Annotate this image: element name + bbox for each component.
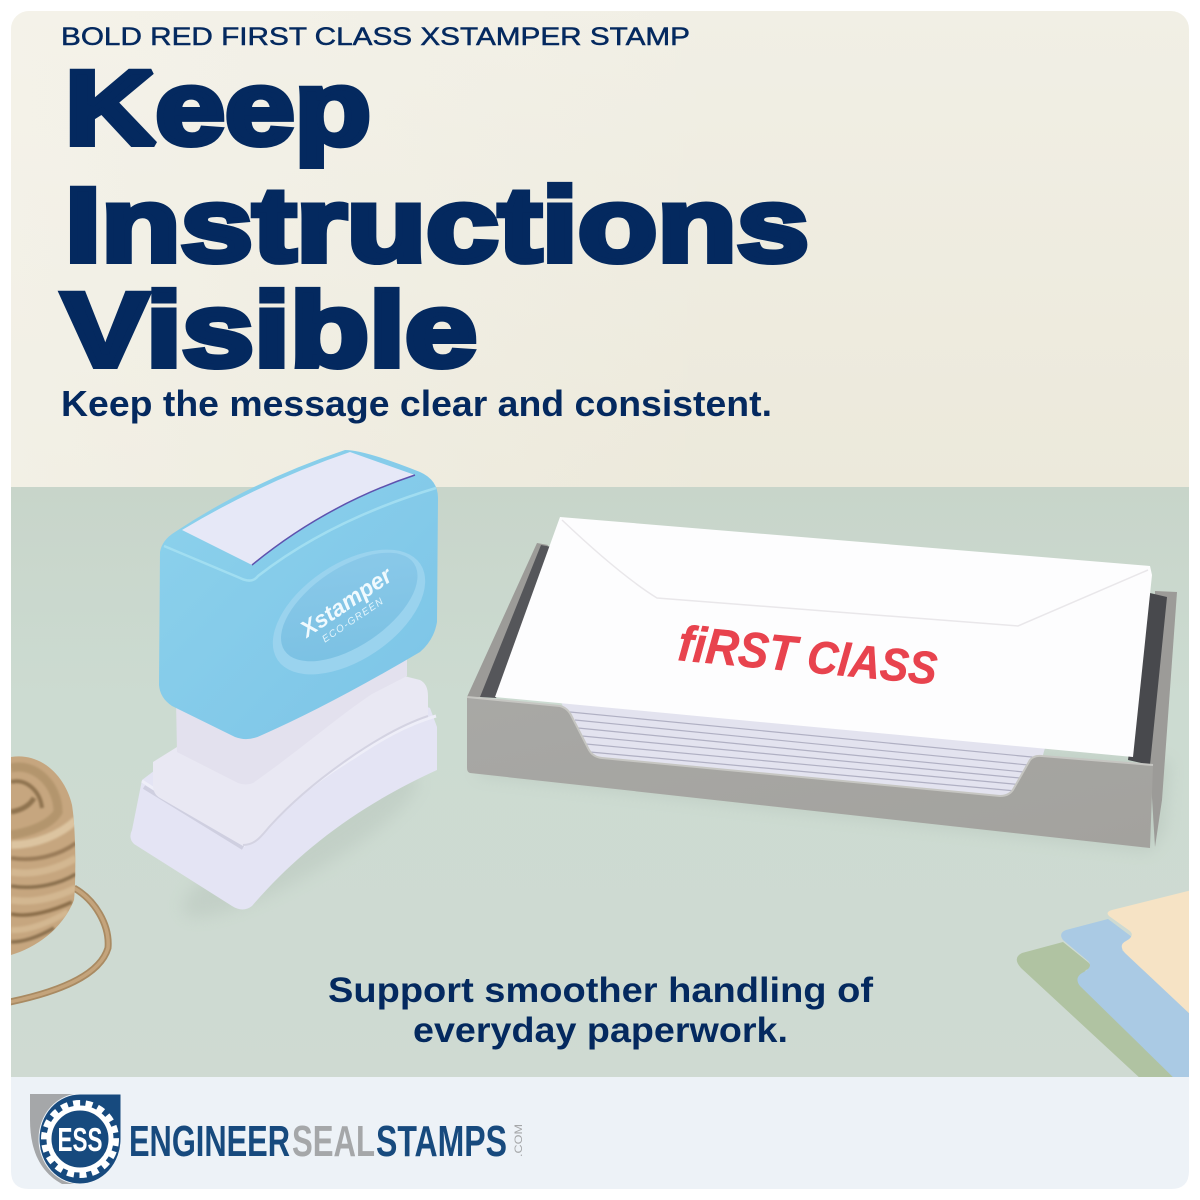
logo wordmark: STAMPS bbox=[376, 1117, 507, 1166]
bottom caption bbox=[328, 971, 873, 1050]
blue folder bbox=[1061, 919, 1192, 1080]
bottom caption: Support smoother handling of bbox=[328, 971, 873, 1010]
stamped first class text: ClASS bbox=[805, 630, 940, 694]
logo wordmark: ENGINEER bbox=[129, 1117, 290, 1166]
main title bbox=[62, 50, 809, 389]
logo .com: .COM bbox=[513, 1124, 525, 1157]
footer logo bbox=[30, 1094, 525, 1184]
envelope tray bbox=[467, 517, 1177, 852]
stamp shoulder bbox=[153, 670, 428, 846]
stamp neck bbox=[176, 640, 407, 784]
small heading: BOLD RED FIRST CLASS XSTAMPER STAMP bbox=[61, 23, 690, 51]
stamp base tray bbox=[130, 660, 437, 910]
envelope top bbox=[495, 517, 1152, 757]
stamp logo oval: ECO-GREEN bbox=[320, 596, 387, 645]
stamp logo oval bbox=[251, 524, 447, 700]
stamp blue handle bbox=[159, 450, 438, 739]
title line: Instructions: Instructions bbox=[65, 167, 809, 284]
subtitle: Keep the message clear and consistent. bbox=[61, 383, 772, 424]
title line: Keep: Keep bbox=[65, 50, 371, 167]
tan folder bbox=[1108, 890, 1192, 1016]
tray back walls bbox=[467, 543, 548, 697]
logo wordmark: SEAL bbox=[292, 1117, 375, 1166]
tray front wall bbox=[467, 697, 1153, 848]
tray dark interior bbox=[480, 545, 552, 698]
stamp label window bbox=[182, 452, 415, 565]
envelope stack bbox=[560, 700, 1045, 800]
logo badge: ESS bbox=[58, 1121, 102, 1158]
logo badge bbox=[30, 1094, 121, 1184]
stamped first class text: fiRST bbox=[676, 615, 803, 683]
twine ball bbox=[5, 756, 108, 1003]
file folders bbox=[1017, 890, 1192, 1080]
bottom caption: everyday paperwork. bbox=[413, 1011, 788, 1050]
green folder bbox=[1017, 942, 1176, 1080]
Xstamper logo: Xstamper bbox=[294, 561, 397, 643]
title line: Visible: Visible bbox=[62, 272, 477, 389]
stamp top rim highlight bbox=[164, 488, 436, 581]
stamped first class text bbox=[676, 615, 940, 694]
logo wordmark bbox=[129, 1117, 507, 1166]
stamp bbox=[130, 450, 447, 938]
footer band bbox=[11, 1077, 1189, 1189]
